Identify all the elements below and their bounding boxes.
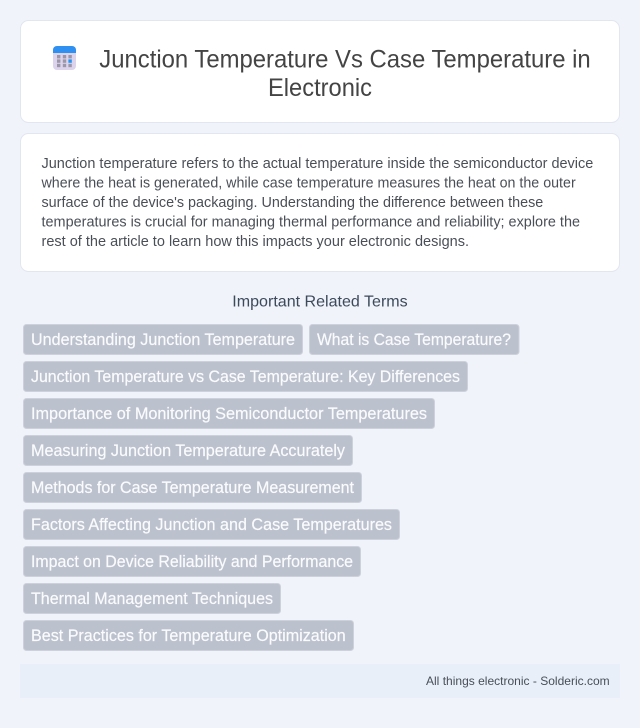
text block: description: Junction temperature refers to the actual temperature inside the semiconductor device — [42, 156, 593, 172]
tag: best practices — [24, 620, 354, 650]
tag: what is case temperature: What is Case Temperature? — [317, 330, 511, 349]
panel: related terms tags — [24, 324, 519, 650]
text block: description: rest of the article to learn how this impacts your electronic designs. — [42, 234, 469, 250]
tag: understanding junction temperature: Understanding Junction Temperature — [31, 330, 295, 349]
tag: key differences: Junction Temperature vs Case Temperature: Key Differences — [31, 367, 460, 386]
tag: case temperature measurement: Methods for Case Temperature Measurement — [31, 478, 354, 497]
footer: All things electronic - Solderic.com — [426, 674, 610, 688]
tag: factors affecting: Factors Affecting Junction and Case Temperatures — [31, 515, 392, 534]
title: Junction Temperature Vs Case Temperature in — [99, 45, 591, 73]
title: Electronic — [268, 74, 372, 102]
tag: thermal management — [24, 584, 280, 614]
panel: description card — [20, 134, 620, 272]
icon: calendar — [53, 46, 76, 70]
tag: best practices: Best Practices for Temperature Optimization — [31, 626, 346, 645]
heading: important related terms: Important Related Terms — [232, 294, 408, 311]
title — [99, 45, 591, 102]
tag: importance of monitoring — [24, 398, 434, 428]
tag: measuring junction temperature — [24, 436, 352, 466]
tag: factors affecting — [24, 510, 400, 540]
tag: importance of monitoring: Importance of Monitoring Semiconductor Temperatures — [31, 404, 427, 423]
tag: reliability and performance: Impact on Device Reliability and Performance — [31, 552, 353, 571]
text block: description: surface of the device's packaging. Understanding the difference between these — [42, 195, 543, 211]
tag: key differences — [24, 362, 468, 392]
text block: description — [41, 156, 593, 250]
footer — [20, 664, 620, 698]
tag: understanding junction temperature — [24, 324, 302, 354]
tag: reliability and performance — [24, 546, 360, 576]
text block: description: temperatures is crucial for managing thermal performance and reliability; explore the — [42, 215, 580, 231]
panel: title card — [20, 20, 620, 122]
tag: measuring junction temperature: Measuring Junction Temperature Accurately — [31, 441, 346, 460]
text block: description: where the heat is generated, while case temperature measures the heat on the outer — [41, 176, 576, 192]
tag: what is case temperature — [310, 324, 519, 354]
tag: thermal management: Thermal Management Techniques — [31, 589, 273, 608]
tag: case temperature measurement — [24, 472, 362, 502]
